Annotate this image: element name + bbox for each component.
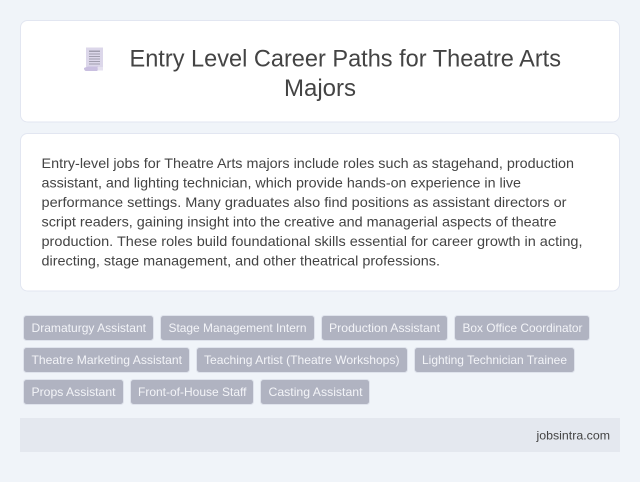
tag: Stage Management Intern [160,316,314,340]
tag: Casting Assistant [260,380,370,404]
icon: scroll [84,48,103,71]
text block: description: directing, stage management, and other theatrical professions. [42,252,440,268]
text block: description [42,155,582,268]
tag: Lighting Technician Trainee [414,348,574,372]
tag: Front-of-House Staff [130,380,254,404]
text block: description: performance settings. Many graduates also find positions as assistant directors or [42,194,567,210]
tag: Production Assistant: Production Assistant [329,321,441,335]
tag: Lighting Technician Trainee: Lighting Technician Trainee [422,353,567,367]
tag: Front-of-House Staff: Front-of-House Staff [138,385,247,399]
tag: Dramaturgy Assistant [24,316,154,340]
text block: description: script readers, gaining insight into the creative and managerial aspects of theatre [42,214,557,230]
title [130,46,561,102]
tag: Dramaturgy Assistant: Dramaturgy Assistant [32,321,147,335]
text block: description: production. These roles build foundational skills essential for career growth in acting, [42,233,582,249]
tag: Production Assistant [322,316,448,340]
tag: Teaching Artist (Theatre Workshops): Teaching Artist (Theatre Workshops) [204,353,400,367]
tag: Props Assistant: Props Assistant [32,385,116,399]
tag: Casting Assistant: Casting Assistant [268,385,363,399]
tag list: job titles [24,316,590,404]
tag: Box Office Coordinator: Box Office Coordinator [462,321,583,335]
title: Entry Level Career Paths for Theatre Arts [130,46,561,72]
panel: description [20,134,620,291]
tag: Box Office Coordinator [454,316,590,340]
tag: Stage Management Intern: Stage Management Intern [168,321,306,335]
text block: description: Entry-level jobs for Theatre Arts majors include roles such as stagehand, production [42,155,574,171]
text block: description: assistant, and lighting technician, which provide hands-on experience in live [42,174,521,190]
tag: Theatre Marketing Assistant: Theatre Marketing Assistant [32,353,183,367]
footer source text: jobsintra.com [535,428,610,442]
tag: Teaching Artist (Theatre Workshops) [196,348,408,372]
tag: Props Assistant [24,380,124,404]
title: Majors [284,75,356,102]
panel: title header [20,20,620,122]
tag: Theatre Marketing Assistant [24,348,190,372]
footer bar [20,418,620,452]
